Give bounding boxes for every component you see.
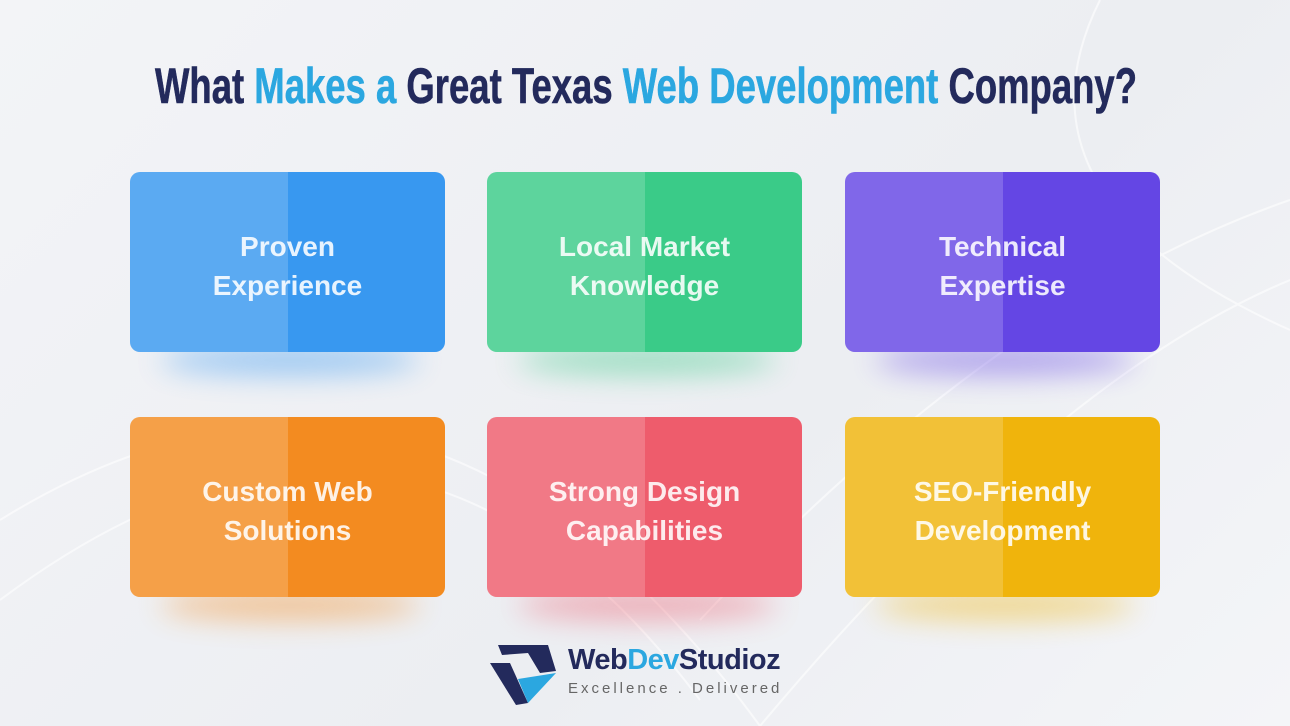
card: Strong Design Capabilities: Capabilities	[566, 515, 723, 546]
brand name: WebDevStudioz	[568, 644, 780, 676]
icon: logo mark	[490, 645, 556, 705]
card: Local Market Knowledge	[487, 172, 802, 352]
card: Custom Web Solutions: Custom Web	[202, 476, 373, 507]
card: Local Market Knowledge: Local Market	[559, 231, 730, 262]
card: Proven Experience: Proven	[240, 231, 335, 262]
logo	[490, 644, 782, 705]
card: Strong Design Capabilities	[487, 417, 802, 597]
card: Technical Expertise: Expertise	[939, 270, 1066, 301]
card: SEO-Friendly Development	[845, 417, 1160, 597]
card: Proven Experience	[130, 172, 445, 352]
card: SEO-Friendly Development: SEO-Friendly	[914, 476, 1091, 507]
card: Technical Expertise	[845, 172, 1160, 352]
tagline: Excellence . Delivered	[568, 680, 782, 697]
card: Local Market Knowledge: Knowledge	[570, 270, 719, 301]
card: Custom Web Solutions: Solutions	[224, 515, 351, 546]
card: Proven Experience: Experience	[213, 270, 362, 301]
card: Custom Web Solutions	[130, 417, 445, 597]
card: Technical Expertise: Technical	[939, 231, 1066, 262]
card: SEO-Friendly Development: Development	[915, 515, 1090, 546]
card: Strong Design Capabilities: Strong Design	[549, 476, 740, 507]
